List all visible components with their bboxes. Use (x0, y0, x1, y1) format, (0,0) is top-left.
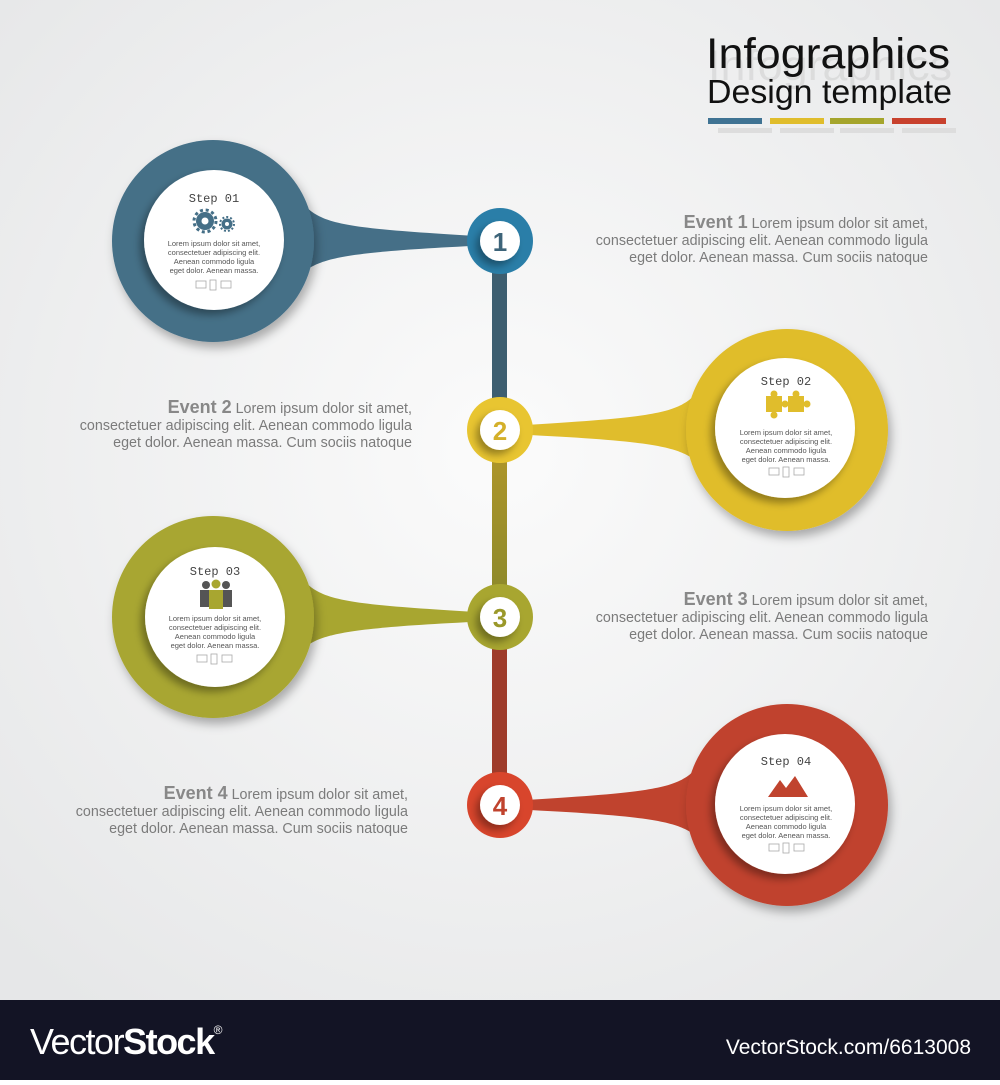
step 2: 2 (493, 416, 507, 446)
footer: VectorStock (30, 1021, 214, 1062)
step 2 (467, 329, 888, 531)
event 4 text: consectetuer adipiscing elit. Aenean commodo ligula (76, 804, 408, 820)
step 4 (467, 704, 888, 906)
title: Design template (707, 73, 952, 110)
event 1 text: Event 1 Lorem ipsum dolor sit amet, (684, 212, 928, 232)
event 4 text (76, 783, 408, 837)
step 1 (112, 140, 533, 342)
step 3 (112, 516, 533, 718)
footer: ® (214, 1023, 223, 1037)
footer (0, 1000, 1000, 1080)
event 2 text: consectetuer adipiscing elit. Aenean commodo ligula (80, 418, 412, 434)
step 4: Lorem ipsum dolor sit amet, (740, 804, 832, 813)
event 2 text: Event 2 Lorem ipsum dolor sit amet, (168, 397, 412, 417)
event 4 text: Event 4 Lorem ipsum dolor sit amet, (164, 783, 408, 803)
event 2 text: eget dolor. Aenean massa. Cum sociis natoque (113, 435, 412, 451)
step 4: Step 04 (761, 755, 811, 769)
step 3: 3 (493, 603, 507, 633)
step 1: Aenean commodo ligula (174, 257, 255, 266)
event 3 text: consectetuer adipiscing elit. Aenean commodo ligula (596, 610, 928, 626)
event 3 text (596, 589, 928, 643)
step 3: Aenean commodo ligula (175, 632, 256, 641)
step 1: Lorem ipsum dolor sit amet, (168, 239, 260, 248)
step 3: Step 03 (190, 565, 240, 579)
title: Infographics (706, 30, 950, 78)
step 2: Lorem ipsum dolor sit amet, (740, 428, 832, 437)
event 4 text: eget dolor. Aenean massa. Cum sociis natoque (109, 821, 408, 837)
event 3 text: eget dolor. Aenean massa. Cum sociis natoque (629, 627, 928, 643)
step 4: Aenean commodo ligula (746, 822, 827, 831)
title: Infographics (708, 42, 952, 90)
step 3: Lorem ipsum dolor sit amet, (169, 614, 261, 623)
step 2: Step 02 (761, 375, 811, 389)
title (706, 30, 956, 133)
footer: VectorStock.com/6613008 (726, 1036, 971, 1059)
step 2: eget dolor. Aenean massa. (742, 455, 830, 464)
step 4: 4 (493, 791, 508, 821)
event 3 text: Event 3 Lorem ipsum dolor sit amet, (684, 589, 928, 609)
step 1: Step 01 (189, 192, 239, 206)
timeline line (492, 241, 507, 805)
event 1 text (596, 212, 928, 266)
event 2 text (80, 397, 412, 451)
step 3: eget dolor. Aenean massa. (171, 641, 259, 650)
step 1: eget dolor. Aenean massa. (170, 266, 258, 275)
step 4: eget dolor. Aenean massa. (742, 831, 830, 840)
step 2: Aenean commodo ligula (746, 446, 827, 455)
event 1 text: eget dolor. Aenean massa. Cum sociis natoque (629, 250, 928, 266)
step 1: consectetuer adipiscing elit. (168, 248, 260, 257)
step 2: consectetuer adipiscing elit. (740, 437, 832, 446)
step 3: consectetuer adipiscing elit. (169, 623, 261, 632)
event 1 text: consectetuer adipiscing elit. Aenean commodo ligula (596, 233, 928, 249)
step 4: consectetuer adipiscing elit. (740, 813, 832, 822)
step 1: 1 (493, 227, 507, 257)
